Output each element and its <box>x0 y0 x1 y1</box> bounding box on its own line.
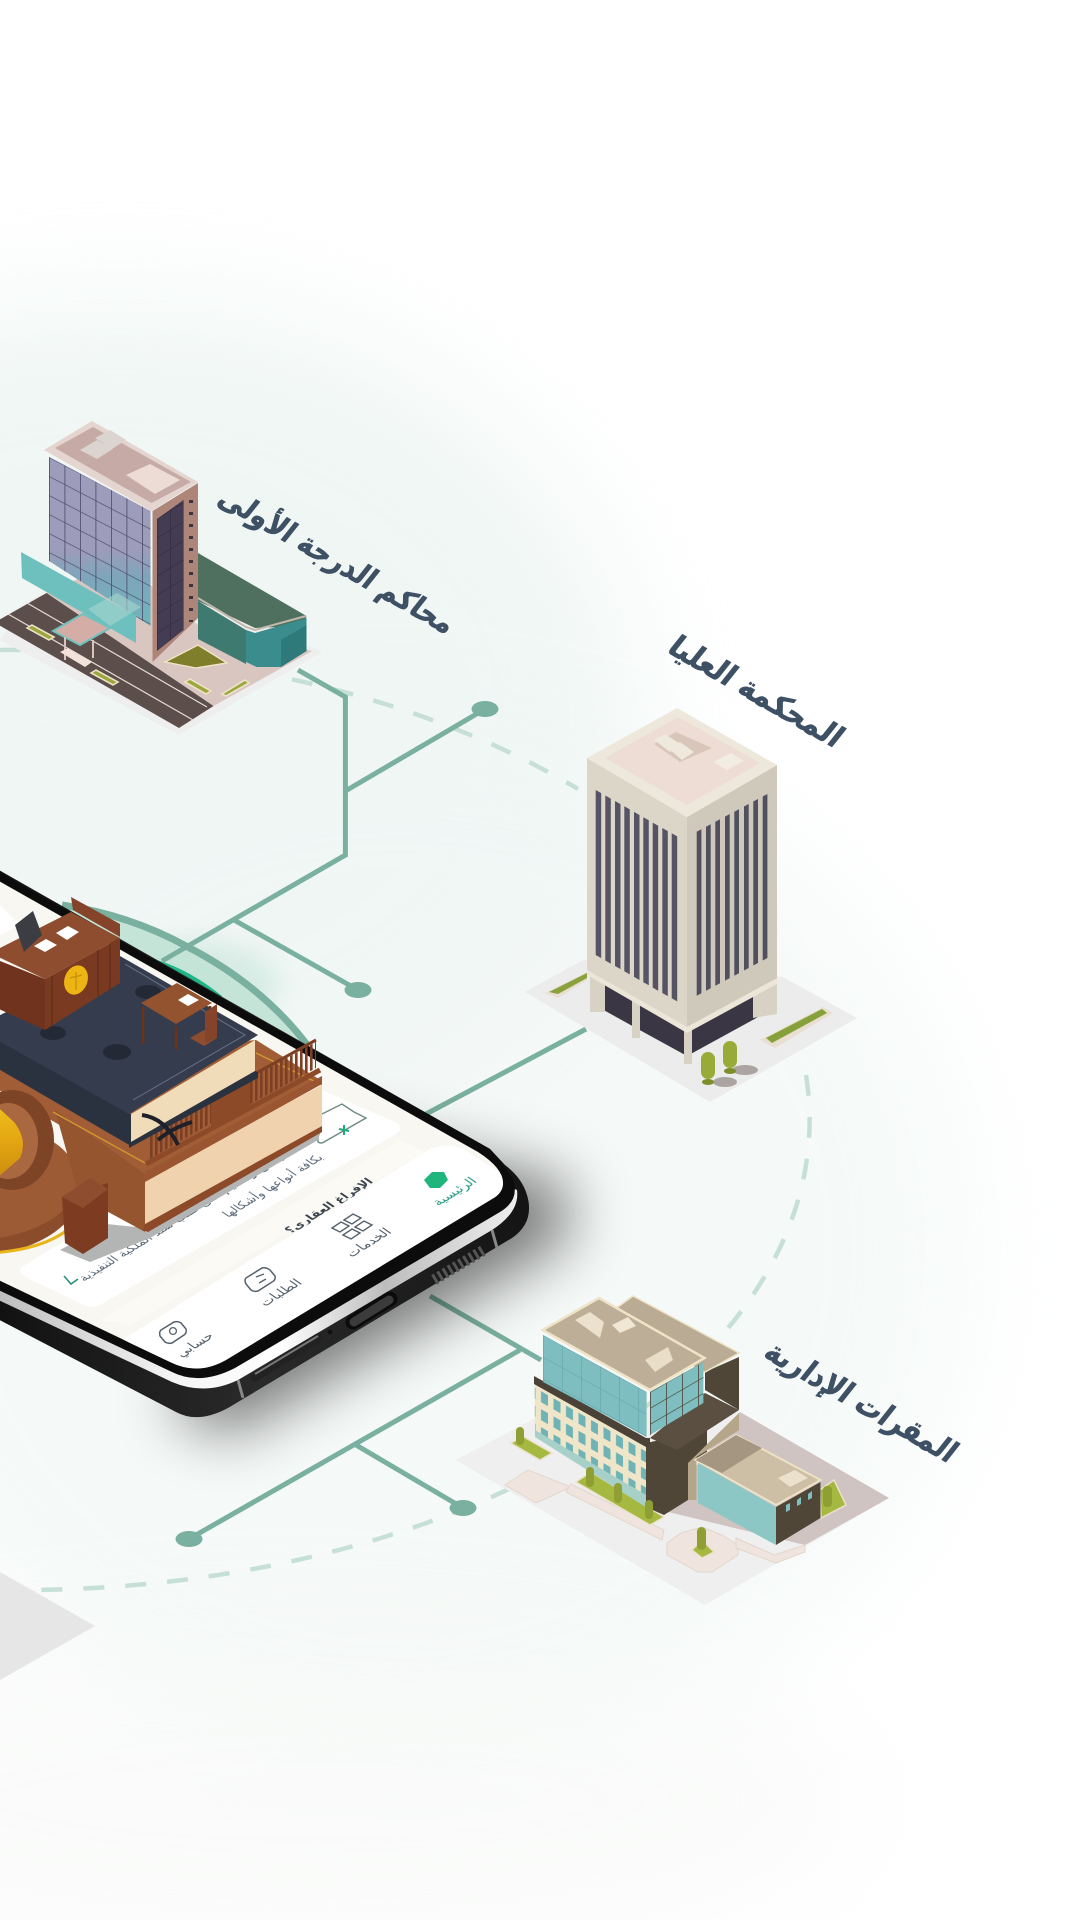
chevron <box>64 1276 78 1284</box>
base <box>0 560 322 735</box>
card body text: مباشرة بيع وتسليم على طلب سند الملكية التنفيذية <box>75 1136 311 1284</box>
question heading: الإفراغ العقاري؟ <box>281 1176 377 1236</box>
bookmark ribbon <box>142 1115 192 1145</box>
nav: home <box>424 1172 477 1205</box>
planters <box>27 625 249 696</box>
tower walls <box>49 457 150 626</box>
phone device <box>0 865 529 1417</box>
lower book: cover <box>0 1040 322 1174</box>
rear block <box>705 1357 739 1410</box>
trees <box>701 1041 758 1087</box>
building: supreme court <box>525 708 857 1102</box>
railing <box>146 1040 320 1164</box>
nav: requests <box>244 1267 302 1306</box>
lower block <box>535 1382 646 1507</box>
nav: account <box>158 1320 212 1358</box>
dashed orbit ring <box>0 650 810 1590</box>
ground floor pillars <box>590 972 777 1064</box>
walkways and plazas <box>505 1470 805 1572</box>
lower book: pages <box>145 1085 322 1224</box>
stacked law books, gavel and courtroom <box>0 897 322 1262</box>
lectern <box>62 1178 108 1254</box>
lower book: bottom cover <box>143 1126 322 1232</box>
phone screen <box>0 876 503 1369</box>
gavel base <box>0 1120 80 1256</box>
shadow under book <box>60 1128 322 1262</box>
nav: services: الخدمات <box>343 1226 396 1260</box>
dome arc <box>62 905 308 1046</box>
title: supreme court: المحكمة العليا <box>660 629 851 755</box>
connector lines and end dots <box>162 670 586 1547</box>
card body text: بكافة أنواعها وأشكالها <box>218 1151 327 1220</box>
phone drop shadow <box>170 1130 570 1435</box>
nav: services <box>332 1214 396 1260</box>
low green wing <box>198 553 306 628</box>
screen content <box>0 895 503 1369</box>
building: first-instance courts <box>0 421 322 735</box>
bottom navigation panel <box>122 1146 503 1369</box>
nav: home: الرئيسية <box>429 1176 481 1209</box>
tower roof <box>44 421 198 511</box>
navy book: spine <box>0 1032 131 1146</box>
planters <box>545 972 587 998</box>
navy book: top <box>0 956 258 1114</box>
ground <box>456 1405 889 1605</box>
title: first-instance courts: محاكم الدرجة الأولى <box>211 480 464 641</box>
title: administrative offices: المقرات الإدارية <box>757 1334 966 1469</box>
ground floor <box>600 980 760 1056</box>
phone silver rim <box>0 1100 517 1389</box>
judge bench <box>0 897 120 1030</box>
folder add icon <box>318 1104 366 1143</box>
clerk table and chair <box>141 983 217 1050</box>
question pill <box>100 1140 425 1325</box>
navy book: pages <box>131 1040 255 1142</box>
nav: requests: الطلبات <box>256 1277 306 1309</box>
gavel head <box>0 1090 54 1190</box>
teal canopy <box>21 552 136 643</box>
phone bezel <box>0 867 515 1378</box>
top white card <box>0 906 18 935</box>
nav: account: حسابي <box>172 1330 218 1360</box>
ports <box>238 1230 497 1398</box>
roof <box>587 708 777 817</box>
window strips <box>596 790 677 1001</box>
planters <box>511 1437 846 1558</box>
building: administrative offices <box>456 1296 889 1605</box>
upper block <box>543 1335 647 1437</box>
service card <box>20 1088 400 1307</box>
trees <box>516 1427 832 1550</box>
small annex <box>698 1463 776 1545</box>
tower walls <box>587 758 687 1027</box>
grey floor tile <box>0 1572 95 1680</box>
phone body <box>0 865 529 1417</box>
glowing dome behind phone <box>62 905 308 1060</box>
